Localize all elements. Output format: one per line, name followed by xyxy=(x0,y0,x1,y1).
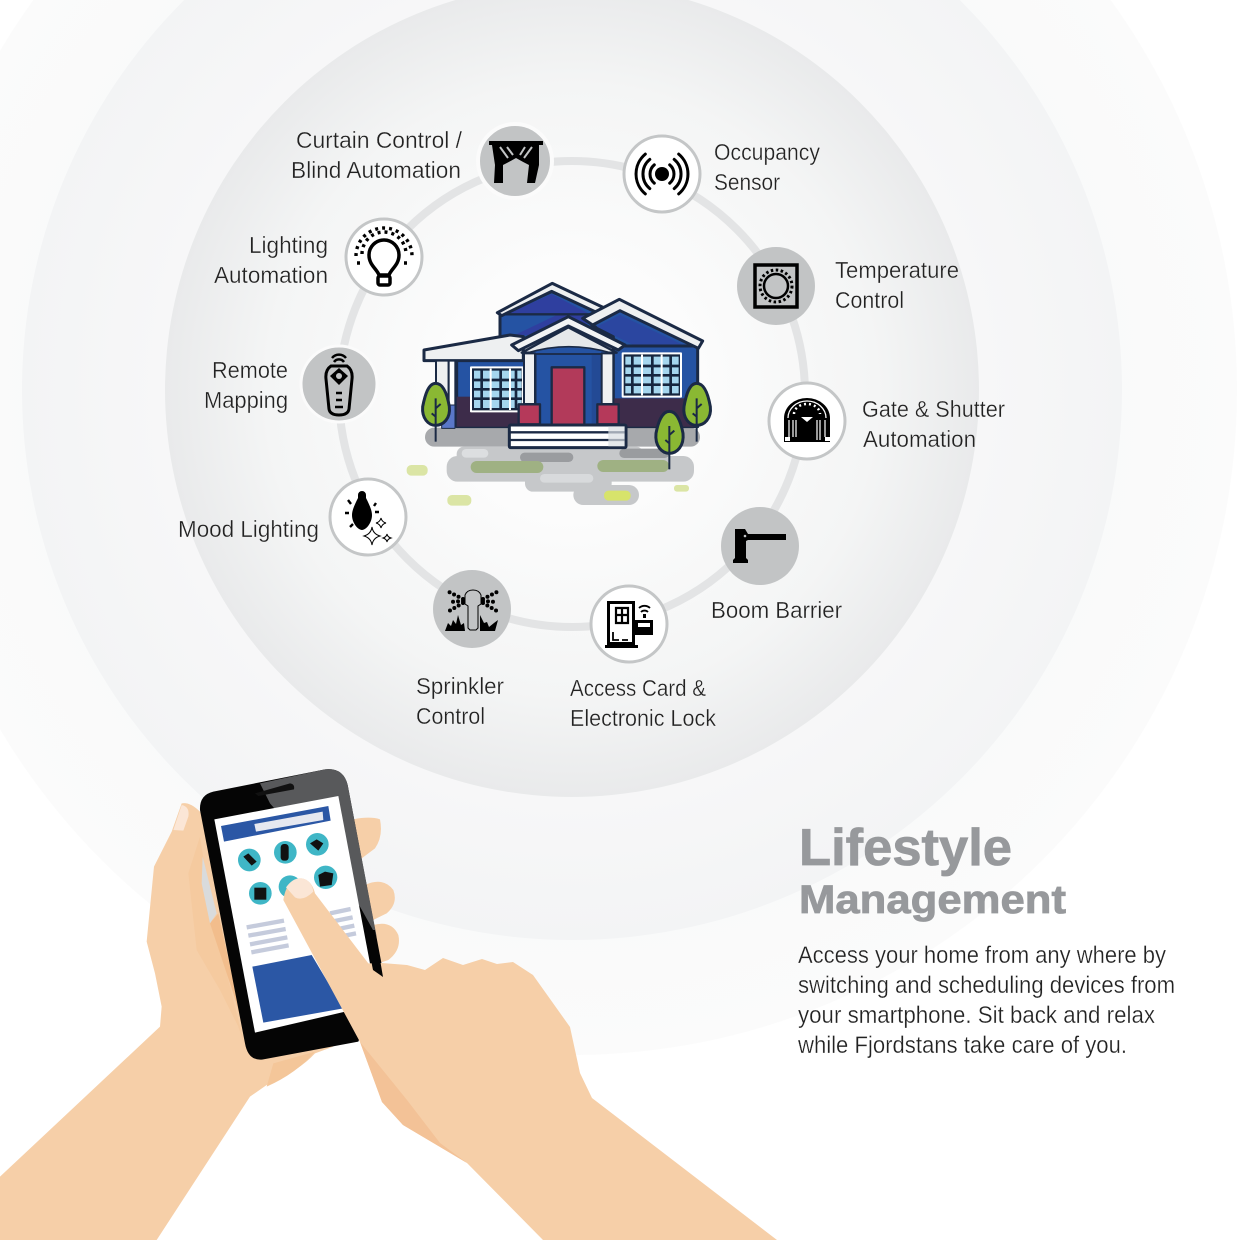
label: mood lighting: Mood Lighting xyxy=(178,516,319,542)
icon: curtain xyxy=(478,124,552,198)
back gable xyxy=(497,283,607,338)
palm shading xyxy=(173,805,315,1087)
trees xyxy=(423,383,710,469)
right window xyxy=(623,353,681,397)
right wing xyxy=(583,299,703,427)
icon: temperature control xyxy=(737,247,815,325)
heading: Lifestyle xyxy=(799,819,1012,877)
pointing hand xyxy=(283,878,777,1240)
icon: access card and lock xyxy=(591,586,667,662)
body text: your smartphone. Sit back and relax xyxy=(798,1002,1155,1029)
icon: sprinkler xyxy=(433,570,511,648)
connecting ring xyxy=(339,161,805,627)
app text lines xyxy=(247,909,356,952)
smartphone xyxy=(200,769,384,1060)
app banner xyxy=(252,955,343,1023)
label: gate and shutter automation: Automation xyxy=(863,426,976,452)
label: gate and shutter automation: Gate & Shutter xyxy=(862,396,1005,422)
label: boom barrier: Boom Barrier xyxy=(711,597,842,623)
heading: Management xyxy=(799,878,1066,922)
house illustration xyxy=(407,283,710,506)
label: temperature control: Control xyxy=(835,287,904,313)
back fingers xyxy=(353,818,399,963)
screen xyxy=(214,796,370,1033)
label: curtain control: Blind Automation xyxy=(291,157,461,183)
label: sprinkler control: Control xyxy=(416,703,485,729)
label: access card and electronic lock: Access Card & xyxy=(570,675,706,701)
label: occupancy sensor: Occupancy xyxy=(714,139,820,165)
label: occupancy sensor: Sensor xyxy=(714,169,780,195)
icon: occupancy sensor xyxy=(624,136,700,212)
app header xyxy=(221,806,331,842)
label: access card and electronic lock: Electronic Lock xyxy=(570,705,716,731)
icon: boom barrier xyxy=(721,507,799,585)
label: lighting automation: Lighting xyxy=(249,232,328,258)
ground and puddles xyxy=(407,428,700,506)
icon: mood lighting xyxy=(330,479,406,555)
centre porch and door xyxy=(509,317,626,448)
left window xyxy=(471,367,523,411)
heading xyxy=(799,819,1066,922)
label: curtain control: Curtain Control / xyxy=(296,127,463,153)
app icons xyxy=(238,833,337,905)
body text: Access your home from any where by xyxy=(798,942,1166,969)
hands and phone xyxy=(0,769,777,1240)
icon: remote xyxy=(301,346,377,422)
label: temperature control: Temperature xyxy=(835,257,959,283)
label: sprinkler control: Sprinkler xyxy=(416,673,504,699)
label: remote mapping: Remote xyxy=(212,357,288,383)
left wing xyxy=(424,335,525,428)
holding hand and arm xyxy=(0,803,333,1240)
icon: gate and shutter xyxy=(769,383,845,459)
body text: switching and scheduling devices from xyxy=(798,972,1175,999)
body text: while Fjordstans take care of you. xyxy=(797,1032,1127,1059)
label: remote mapping: Mapping xyxy=(204,387,288,413)
label: lighting automation: Automation xyxy=(214,262,328,288)
icon: lighting xyxy=(346,219,422,295)
